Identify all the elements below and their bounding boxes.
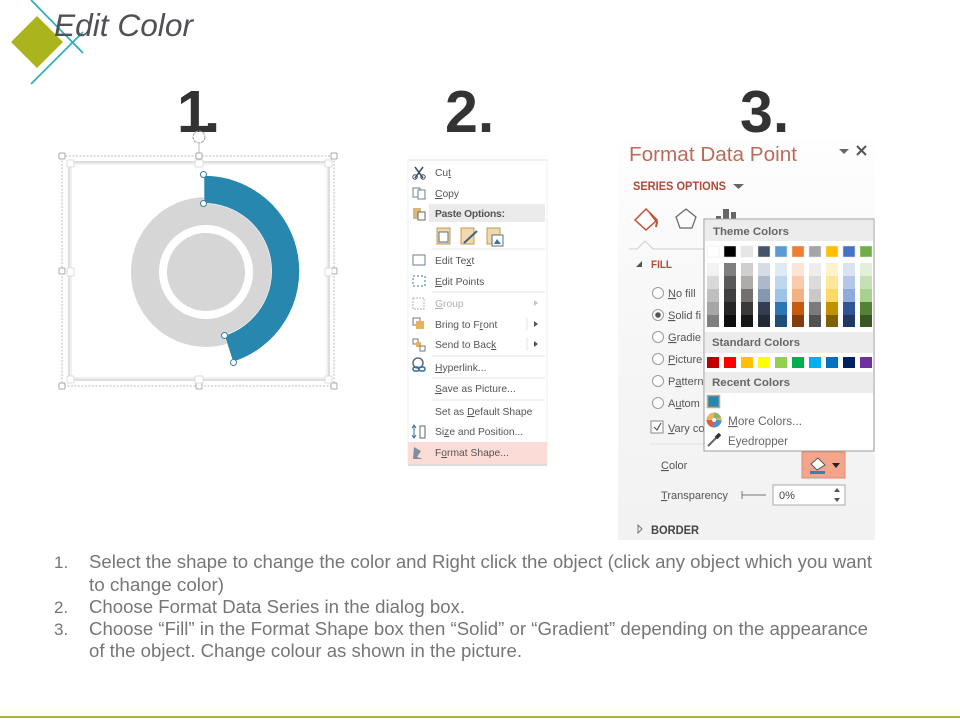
menu labels: Hyperlink... [435,363,487,374]
pane title: Format Data Point [629,143,797,166]
text block: instructions: 3. [54,620,68,639]
menu labels: Group [435,299,464,310]
text block: instructions: Select the shape to change the color and Right click the object (click any object which you want [89,552,872,572]
step number 2: 2. [445,79,494,145]
pane controls [839,146,866,155]
fill option labels: Pattern [668,376,703,388]
fill option labels: Picture [668,354,702,366]
menu labels: Format Shape... [435,448,509,459]
fill section header [636,261,642,267]
menu icons [412,167,503,459]
footer rule [0,706,960,718]
text block: instructions: Choose “Fill” in the Format Shape box then “Solid” or “Gradient” depending on the appearance [89,619,868,639]
icon: title diamond with crossed lines [11,0,83,84]
panel: colour picker popup: Recent Colors [712,377,790,389]
transparency control [661,485,845,505]
text block: instructions: of the object. Change colour as shown in the picture. [89,641,522,661]
recent colour swatch [708,396,720,408]
menu labels: Size and Position... [435,427,523,438]
more colors item [706,412,802,428]
recent colors heading [705,372,873,393]
fill option labels: Solid fi [668,310,701,322]
more colors item: More Colors... [728,416,802,428]
theme colors heading [705,220,873,241]
menu labels: Save as Picture... [435,384,516,395]
menu labels: Bring to Front [435,320,498,331]
panel: context menu [408,160,547,465]
series options label: SERIES OPTIONS [633,181,726,193]
title: Edit Color [54,7,195,43]
color control: Color [661,460,688,472]
step number 3: 3. [740,79,789,145]
menu labels: Send to Back [435,340,497,351]
menu labels: Paste Options: [435,209,505,220]
fill option labels: Autom [668,398,700,410]
menu labels: Copy [435,189,460,200]
menu labels [435,168,533,459]
submenu arrows [534,300,538,347]
color control [661,452,845,478]
text block: instructions: to change color) [89,575,224,595]
fill option labels [668,288,704,435]
panel: colour picker popup: Standard Colors [712,337,800,349]
text block: instructions [54,552,872,661]
standard colors heading [705,332,873,353]
format shape highlight [408,442,547,464]
fill option labels: No fill [668,288,696,300]
eyedropper item: Eyedropper [728,436,788,448]
panel: colour picker popup: Theme Colors [713,226,789,238]
text block: instructions: 2. [54,598,68,617]
panel: format data point pane: BORDER [651,525,700,537]
panel: format data point pane: FILL [651,259,672,271]
theme colour shades [707,263,872,327]
panel: format data point pane [618,140,875,540]
step number 1: 1. [177,79,220,145]
eyedropper item [708,434,788,448]
menu labels: Set as Default Shape [435,407,533,418]
transparency control: Transparency [661,490,728,502]
transparency control: 0% [779,490,795,502]
fill option radios [652,288,664,408]
doughnut ring [131,197,281,347]
menu labels: Edit Text [435,256,474,267]
fill option labels: Gradie [668,332,701,344]
pane tab icons [635,209,736,230]
fill option labels: Vary co [668,423,704,435]
menu labels: Edit Points [435,277,484,288]
text block: instructions: Choose Format Data Series in the dialog box. [89,597,465,617]
highlighted blue segment [204,176,300,362]
panel: selected doughnut chart [59,131,337,389]
menu separators [432,249,545,400]
text block: instructions: 1. [54,553,68,572]
paste options header [429,204,545,222]
standard colour swatches [707,357,872,368]
menu labels: Cut [435,168,451,179]
selection frame [59,131,337,389]
theme colour swatches [707,246,872,257]
panel: colour picker popup [704,219,874,451]
segment handles [200,172,236,366]
border section header [638,525,642,533]
